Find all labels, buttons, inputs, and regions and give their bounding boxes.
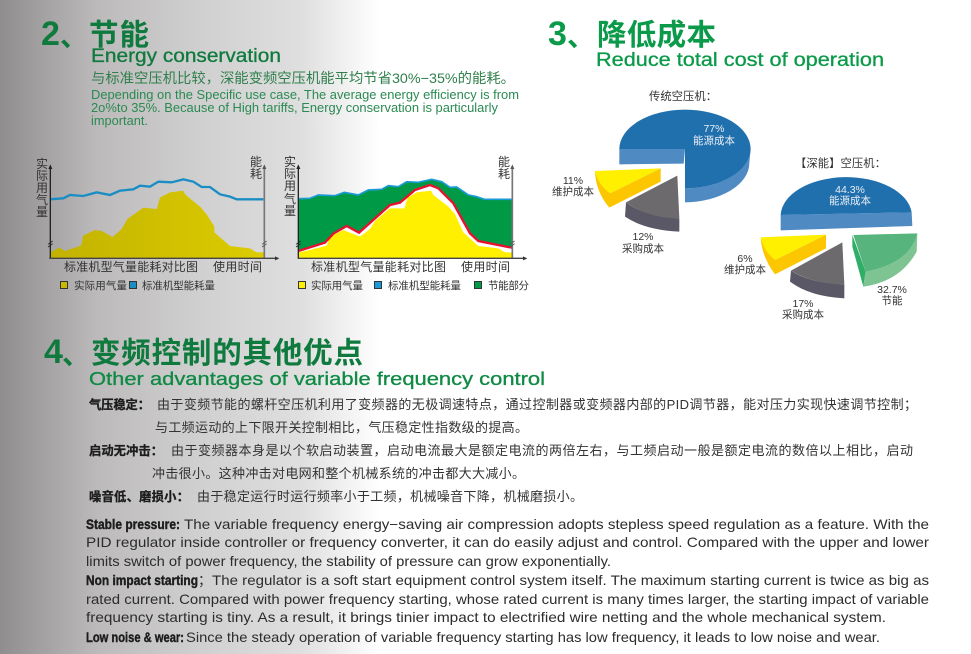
English advantages text: PID regulator inside controller or frequency converter, it can do easily adjust and control. Compared with the upper and lower	[86, 535, 930, 550]
section 3 heading: reduce cost: 、	[567, 21, 595, 52]
section 4 heading: other advantages: 、	[62, 339, 90, 370]
Chinese advantages text: 由于变频节能的螺杆空压机利用了变频器的无极调速特点，通过控制器或变频器内部的PID调节器，能对压力实现快速调节控制；	[157, 397, 917, 413]
chart: deep energy machine air use vs energy: 耗	[498, 167, 510, 181]
chart: deep energy machine air use vs energy: 实	[284, 154, 296, 169]
chart: deep energy machine air use vs energy	[284, 154, 527, 274]
section 4 heading: other advantages: 4	[44, 333, 63, 371]
legend: chart one: 标准机型能耗量	[142, 279, 216, 292]
pie chart: deep energy compressor: 节能	[882, 294, 903, 307]
English advantages text: Since the steady operation of variable frequency starting has low frequency, it leads to low noise and wear.	[186, 630, 880, 645]
legend: chart two: 节能部分	[488, 279, 530, 292]
chart: deep energy machine air use vs energy: 际	[284, 167, 296, 181]
Chinese advantages text: 启动无冲击：	[89, 443, 163, 458]
Chinese advantages text: 由于稳定运行时运行频率小于工频，机械噪音下降，机械磨损小。	[197, 489, 583, 504]
section 2 description text: Depending on the Specific use case, The average energy efficiency is from	[91, 88, 519, 102]
English advantages text: Non impact starting	[86, 572, 198, 588]
English advantages text	[86, 516, 930, 645]
chart: standard machine air use vs energy: 际	[36, 169, 48, 183]
chart: standard machine air use vs energy: 标准机型气量能耗对比图	[64, 259, 198, 274]
chart: standard machine air use vs energy: 用	[36, 181, 48, 195]
chart: standard machine air use vs energy: 气	[36, 192, 48, 207]
Chinese advantages text	[89, 397, 917, 504]
legend: chart two: 标准机型能耗量	[388, 279, 462, 292]
English advantages text: ；	[198, 573, 212, 589]
chart: deep energy machine air use vs energy: 气	[284, 191, 296, 206]
Chinese advantages text: 与工频运动的上下限开关控制相比，气压稳定性指数级的提高。	[155, 420, 528, 435]
section 3 heading: reduce cost: 降低成本	[597, 19, 716, 52]
chart: deep energy machine air use vs energy: 标准机型气量能耗对比图	[311, 259, 446, 274]
Chinese advantages text: 冲击很小。这种冲击对电网和整个机械系统的冲击都大大减小。	[152, 466, 525, 481]
legend: chart one	[60, 279, 216, 292]
section 2 heading: energy conservation: Energy conservation	[91, 46, 281, 67]
pie chart: deep energy compressor: 32.7%	[877, 284, 907, 296]
chart: standard machine air use vs energy: 实	[36, 156, 48, 171]
chart: deep energy machine air use vs energy: 量	[284, 204, 296, 218]
pie chart: deep energy compressor: 采购成本	[782, 308, 824, 321]
section 2 heading: energy conservation: 2	[41, 15, 60, 53]
section 3 heading: reduce cost: 3	[548, 15, 567, 53]
chart: standard machine air use vs energy: 量	[36, 205, 48, 219]
Chinese advantages text: 由于变频器本身是以个软启动装置，启动电流最大是额定电流的两倍左右，与工频启动一般是额定电流的数倍以上相比，启动	[171, 443, 913, 458]
section 4 heading: other advantages	[44, 333, 545, 389]
pie chart: conventional compressor: 采购成本	[622, 242, 664, 255]
English advantages text: Low noise & wear:	[86, 629, 184, 645]
pie chart: conventional compressor	[552, 89, 751, 255]
legend: chart one: 实际用气量	[74, 279, 128, 292]
section 4 heading: other advantages: 变频控制的其他优点	[91, 337, 363, 370]
English advantages text: Stable pressure:	[86, 516, 180, 532]
chart: deep energy machine air use vs energy: 能	[498, 155, 510, 169]
chart: standard machine air use vs energy: 能	[250, 155, 262, 169]
section 2 description text: 2o%to 35%. Because of High tariffs, Energy conservation is particularly	[91, 101, 499, 115]
English advantages text: limits switch of power frequency, the stability of pressure can grow exponentially.	[86, 554, 611, 569]
pie chart: conventional compressor: 77%	[703, 123, 725, 135]
pie chart: deep energy compressor	[724, 156, 917, 321]
chart: standard machine air use vs energy: 耗	[250, 167, 262, 181]
pie chart: conventional compressor: 12%	[632, 231, 654, 243]
English advantages text: frequency starting is tiny. As a result, it brings tinier impact to electrified wire netting and the whole mechanical system.	[86, 610, 886, 625]
English advantages text: The variable frequency energy−saving air compression adopts stepless speed regulation as a feature. With the	[184, 517, 929, 532]
pie chart: deep energy compressor: 能源成本	[829, 194, 871, 207]
pie chart: conventional compressor: 传统空压机：	[649, 89, 717, 103]
legend: chart two: 实际用气量	[311, 279, 364, 292]
chart: standard machine air use vs energy: 使用时间	[213, 259, 262, 274]
pie chart: deep energy compressor: 维护成本	[724, 263, 766, 276]
pie chart: deep energy compressor: 【深能】空压机：	[795, 156, 886, 170]
pie chart: deep energy compressor: 6%	[737, 253, 753, 265]
section 3 heading: reduce cost: Reduce total cost of operation	[596, 50, 884, 71]
section 2 description text: important.	[91, 114, 148, 128]
English advantages text: rated current. Compared with power frequency starting, whose rated current is many times larger, the starting impact of variable	[86, 592, 929, 607]
section 2 heading: energy conservation	[41, 15, 281, 67]
section 2 heading: energy conservation: 节能	[89, 19, 149, 52]
pie chart: deep energy compressor: 17%	[792, 298, 814, 310]
chart: standard machine air use vs energy	[36, 155, 279, 274]
section 4 heading: other advantages: Other advantages of variable frequency control	[89, 368, 545, 389]
section 2 description text: 与标准空压机比较，深能变频空压机能平均节省30%−35%的能耗。	[91, 70, 515, 86]
Chinese advantages text: 气压稳定：	[89, 397, 150, 412]
pie chart: conventional compressor: 维护成本	[552, 185, 594, 198]
section 2 heading: energy conservation: 、	[60, 21, 88, 52]
legend: chart two	[298, 279, 530, 292]
section 2 description text	[91, 70, 519, 128]
pie chart: conventional compressor: 能源成本	[693, 134, 735, 147]
section 3 heading: reduce cost	[548, 15, 884, 71]
chart: deep energy machine air use vs energy: 使用时间	[461, 259, 510, 274]
English advantages text: The regulator is a soft start equipment control system itself. The maximum starting current is twice as big as	[212, 573, 929, 588]
Chinese advantages text: 噪音低、磨损小：	[89, 489, 189, 504]
pie chart: deep energy compressor: 44.3%	[835, 184, 865, 196]
chart: deep energy machine air use vs energy: 用	[284, 179, 296, 193]
pie chart: conventional compressor: 11%	[563, 175, 583, 187]
